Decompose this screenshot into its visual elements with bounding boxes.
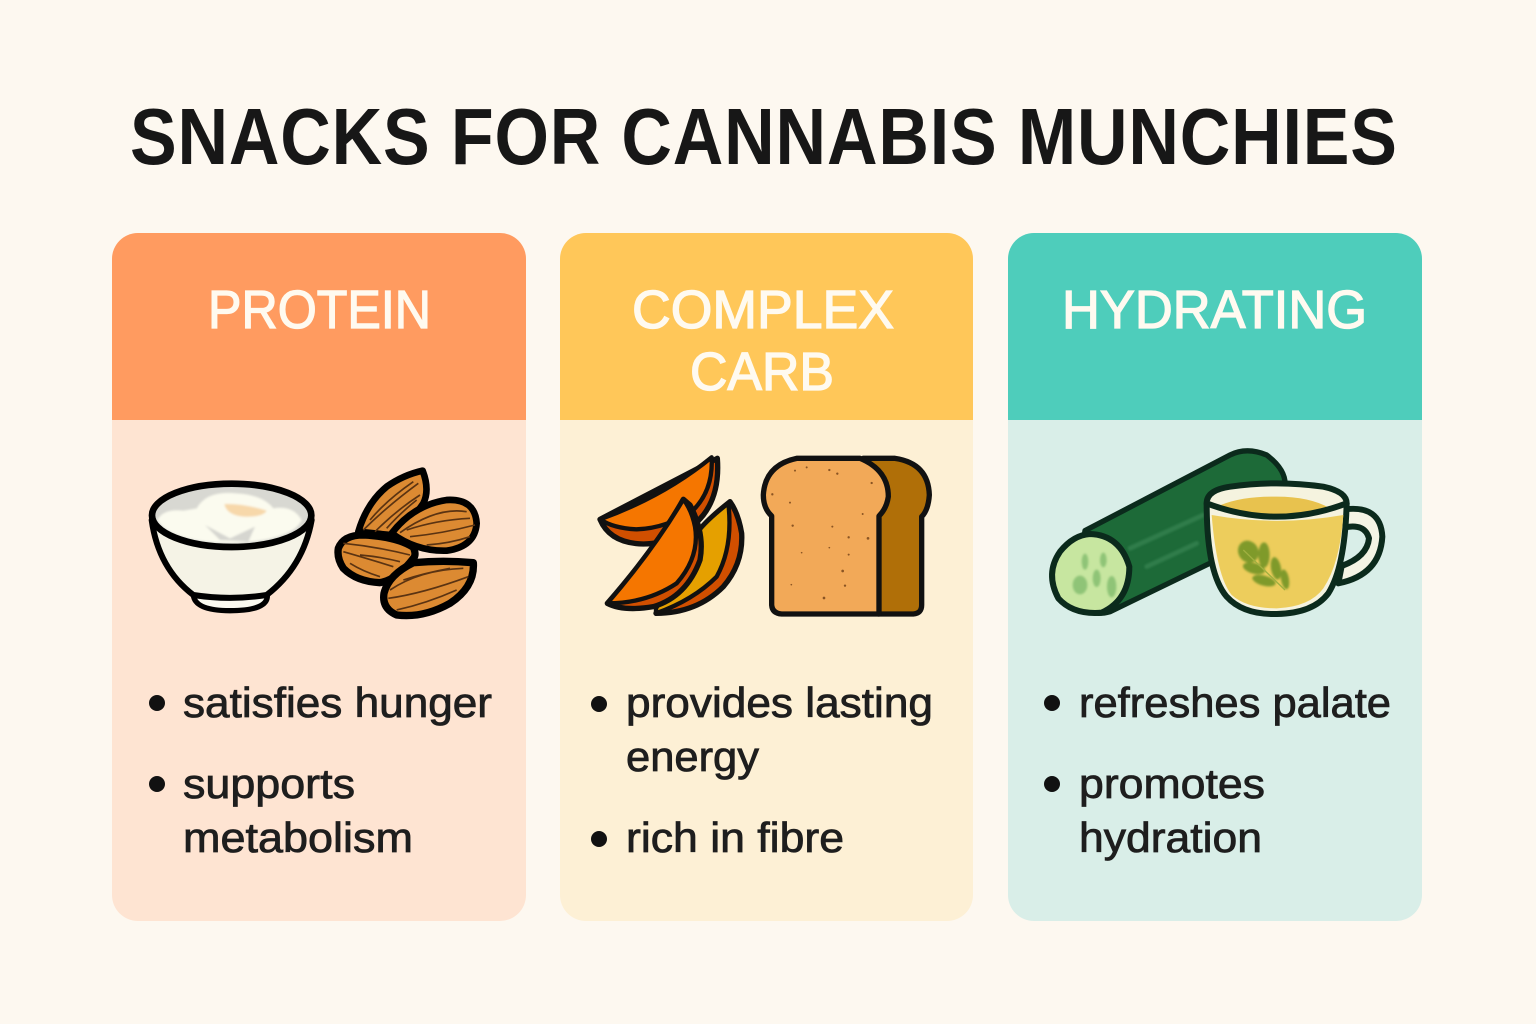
panel body: protein [112, 233, 526, 921]
bullet list: hydrating: hydration [1079, 814, 1262, 861]
icon: yogurt bowl [152, 484, 312, 611]
panel: protein [112, 233, 526, 921]
heading: complex carb: COMPLEX [632, 280, 894, 340]
bullet list: hydrating: refreshes palate [1079, 679, 1391, 726]
panel body: complex carb [560, 233, 973, 921]
panel: complex carb [560, 233, 973, 921]
bullet list: protein: supports [183, 760, 355, 807]
icon: herbal tea cup [1206, 483, 1382, 614]
bullet list: protein: metabolism [183, 814, 413, 861]
bullet list: hydrating: promotes [1079, 760, 1265, 807]
icon: bread loaf [763, 458, 929, 614]
icon: almonds [338, 471, 477, 616]
panel body: hydrating [1008, 233, 1422, 921]
bullet list: complex carb: energy [626, 733, 759, 780]
bullet list: complex carb [591, 679, 933, 861]
heading: complex carb [632, 280, 894, 402]
bullet list: hydrating [1044, 679, 1391, 861]
heading: protein: PROTEIN [208, 280, 431, 340]
bullet list: complex carb: rich in fibre [626, 814, 844, 861]
heading: hydrating: HYDRATING [1062, 280, 1367, 340]
bullet list: protein: satisfies hunger [183, 679, 492, 726]
bullet list: protein [149, 679, 492, 861]
panel header: protein [112, 233, 526, 420]
icon: cucumber [1052, 451, 1285, 613]
panel header: hydrating [1008, 233, 1422, 420]
panel: hydrating [1008, 233, 1422, 921]
panel header: complex carb [560, 233, 973, 420]
heading: complex carb: CARB [690, 342, 834, 402]
bullet list: complex carb: provides lasting [626, 679, 933, 726]
title: SNACKS FOR CANNABIS MUNCHIES [130, 92, 1397, 181]
icon: sweet potato wedges [600, 457, 742, 613]
